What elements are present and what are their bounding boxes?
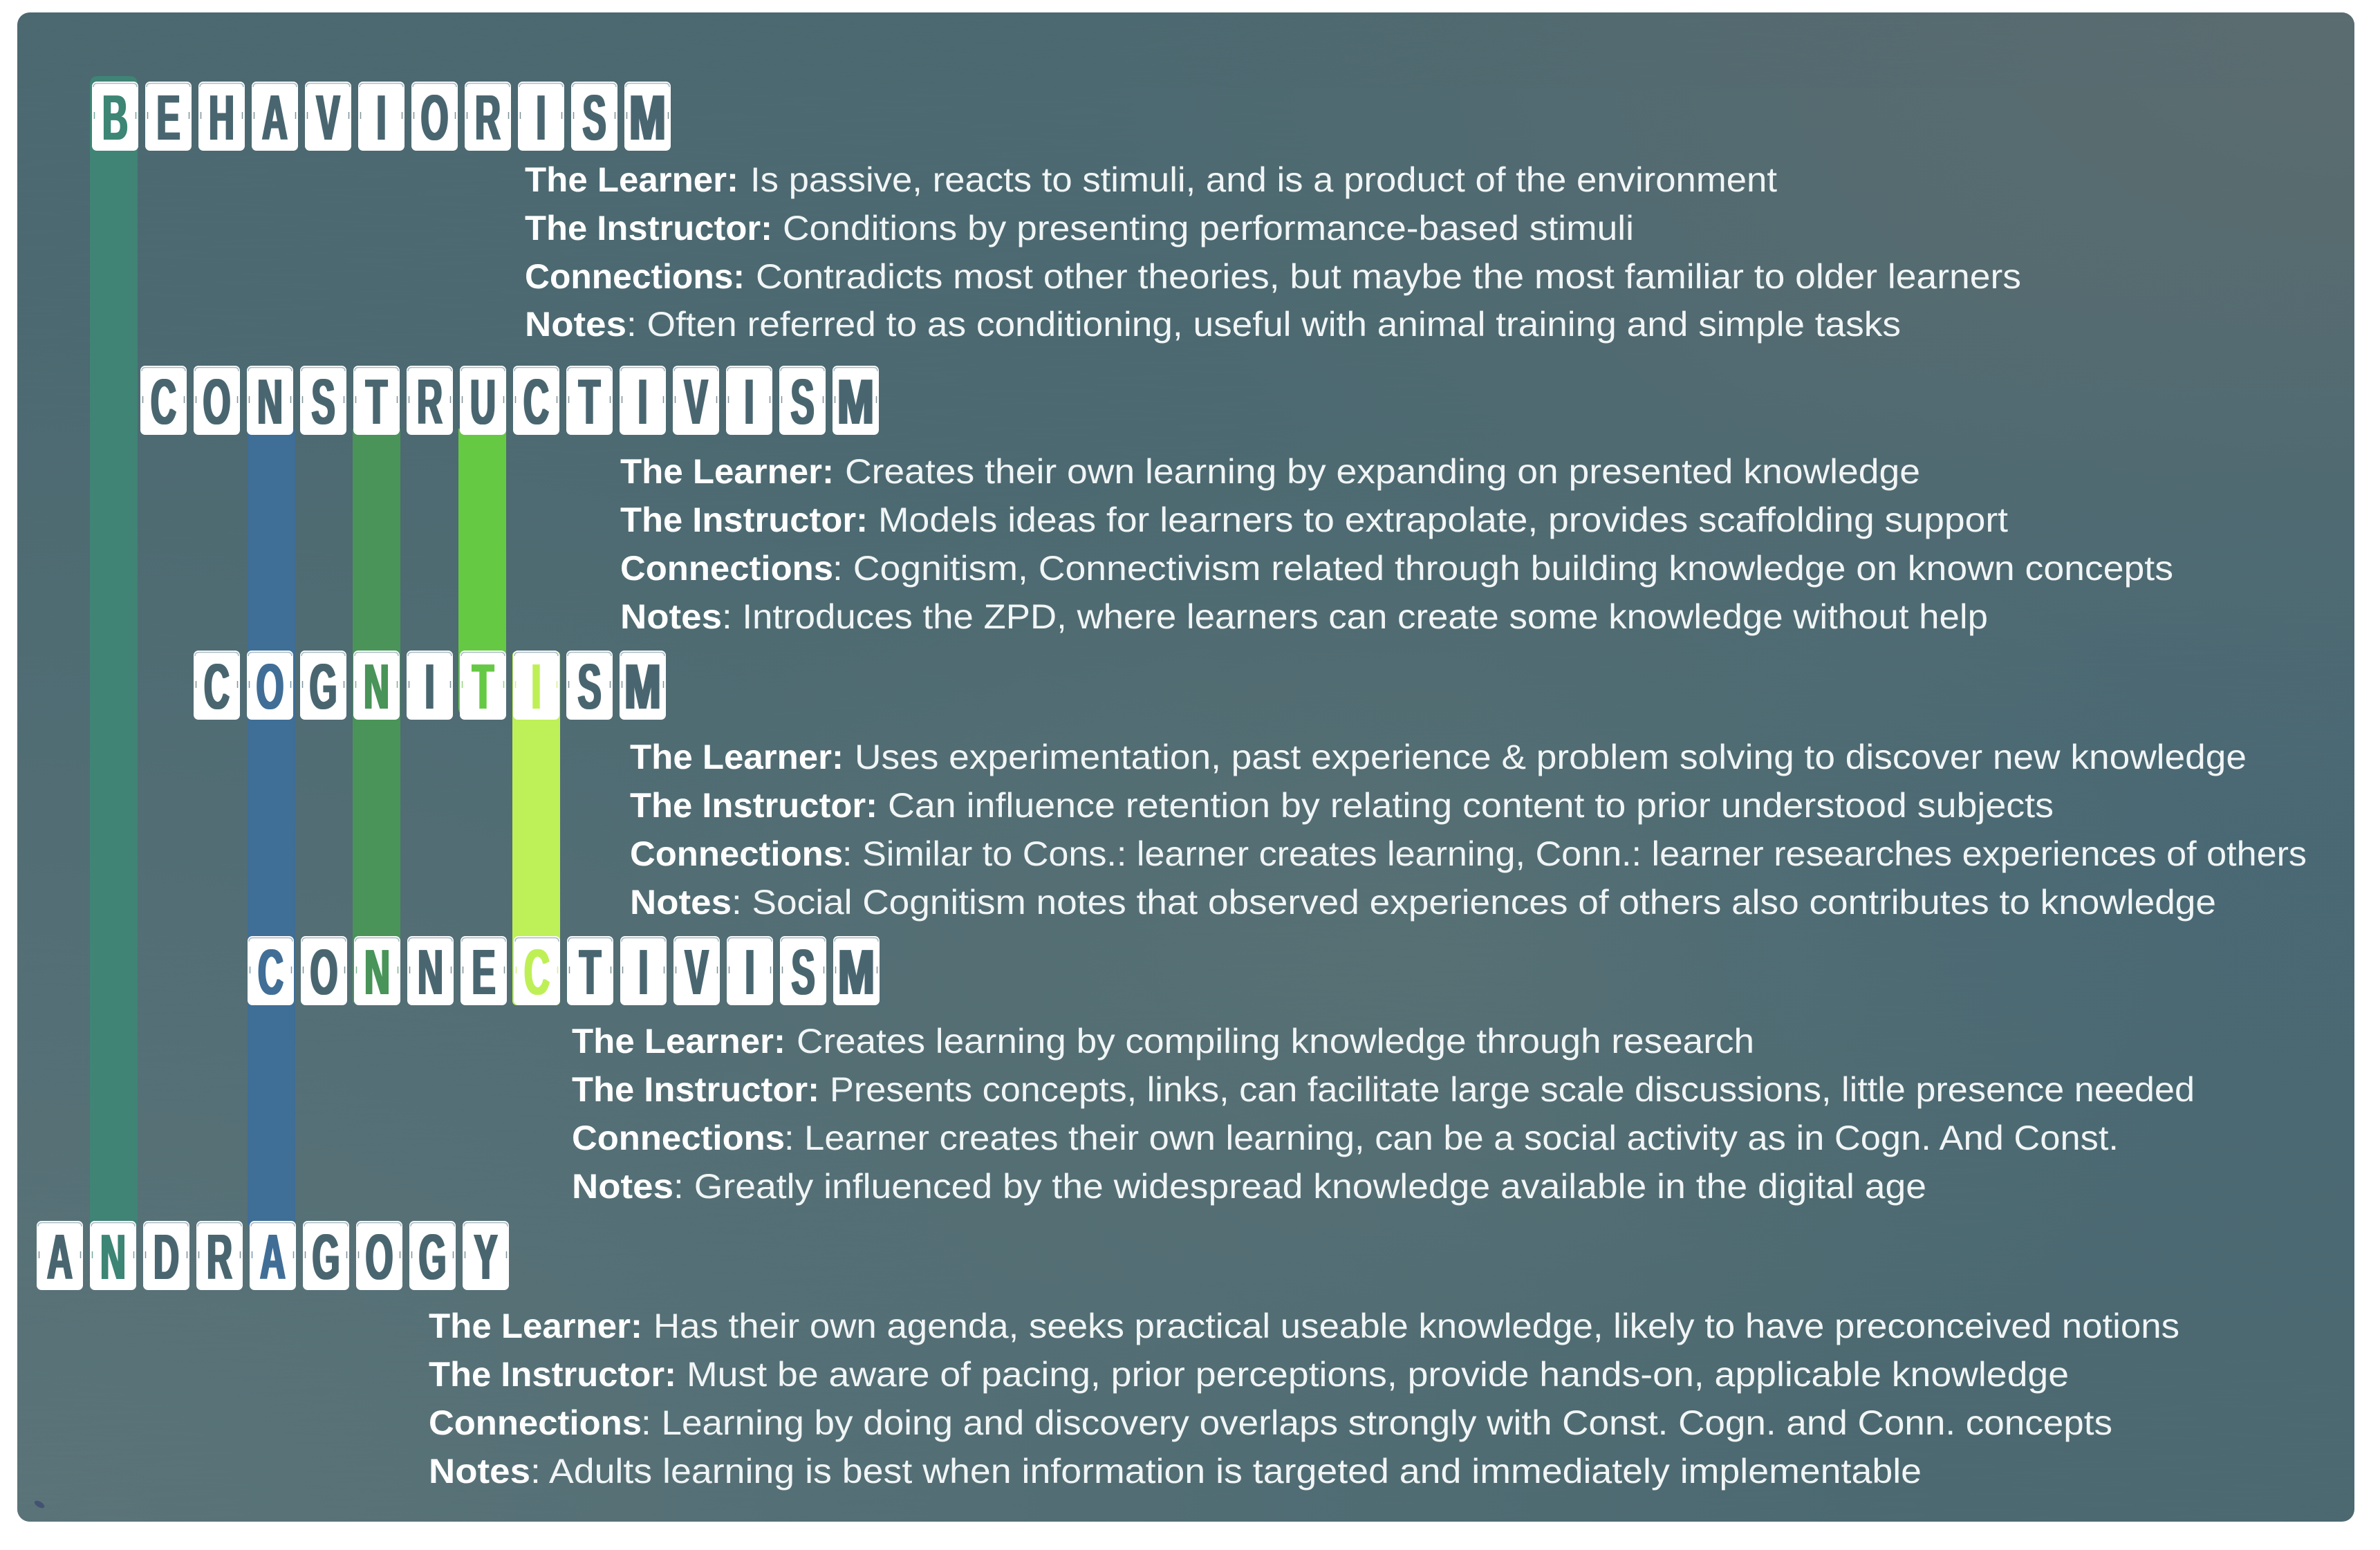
heading: CONSTRUCTIVISM: T bbox=[366, 366, 387, 438]
line: Connections: Connections bbox=[572, 1119, 785, 1157]
heading: COGNITISM: S bbox=[577, 651, 602, 722]
heading: COGNITISM: N bbox=[364, 651, 389, 722]
heading: CONSTRUCTIVISM: O bbox=[203, 366, 230, 438]
line: Notes: : Social Cognitism notes that observed experiences of others also contributes to knowledge bbox=[732, 883, 2216, 922]
heading: CONNECTIVISM: S bbox=[791, 936, 815, 1008]
line: Notes: : Adults learning is best when information is targeted and immediately implementable bbox=[530, 1452, 1922, 1491]
heading: BEHAVIORISM: S bbox=[582, 82, 606, 153]
heading: CONSTRUCTIVISM: M bbox=[837, 366, 874, 438]
bar: Behaviorism to Andragogy bbox=[90, 76, 138, 1225]
line: The Learner: The Learner: bbox=[620, 452, 834, 491]
heading: ANDRAGOGY: A bbox=[260, 1221, 286, 1293]
line: The Instructor: The Instructor: bbox=[620, 501, 868, 539]
line: Connections: : Learning by doing and discovery overlaps strongly with Const. Cogn. and Conn. concepts bbox=[641, 1403, 2112, 1442]
heading: CONNECTIVISM: V bbox=[685, 936, 709, 1008]
heading: COGNITISM bbox=[194, 651, 666, 722]
line: The Learner: The Learner: bbox=[525, 160, 738, 199]
heading: ANDRAGOGY: Y bbox=[474, 1221, 498, 1293]
heading: CONNECTIVISM: I bbox=[745, 936, 755, 1008]
heading: ANDRAGOGY: D bbox=[154, 1221, 179, 1293]
heading: CONSTRUCTIVISM bbox=[140, 366, 879, 438]
text block: Connectivism details bbox=[572, 1022, 2195, 1206]
line: Connections: : Cognitism, Connectivism related through building knowledge on known concepts bbox=[833, 549, 2173, 588]
line: The Instructor: Presents concepts, links, can facilitate large scale discussions, little presence needed bbox=[830, 1070, 2195, 1109]
heading: ANDRAGOGY: G bbox=[419, 1221, 446, 1293]
heading: COGNITISM: C bbox=[204, 651, 230, 722]
heading: ANDRAGOGY bbox=[37, 1221, 509, 1293]
line: Notes: : Introduces the ZPD, where learners can create some knowledge without help bbox=[722, 597, 1988, 636]
line: Notes: Notes bbox=[429, 1452, 530, 1491]
line: The Learner: Creates their own learning by expanding on presented knowledge bbox=[845, 452, 1920, 491]
heading: CONNECTIVISM: C bbox=[524, 936, 550, 1008]
line: Notes: Notes bbox=[525, 305, 626, 344]
heading: CONSTRUCTIVISM: T bbox=[579, 366, 600, 438]
heading: CONNECTIVISM: C bbox=[258, 936, 283, 1008]
heading: CONSTRUCTIVISM: C bbox=[151, 366, 176, 438]
heading: CONSTRUCTIVISM: I bbox=[638, 366, 648, 438]
heading: BEHAVIORISM: V bbox=[316, 82, 340, 153]
heading: CONSTRUCTIVISM: S bbox=[790, 366, 815, 438]
heading: COGNITISM: I bbox=[425, 651, 435, 722]
heading: CONSTRUCTIVISM: I bbox=[744, 366, 754, 438]
heading: BEHAVIORISM: R bbox=[475, 82, 501, 153]
heading: CONSTRUCTIVISM: S bbox=[311, 366, 335, 438]
line: The Instructor: Must be aware of pacing, prior perceptions, provide hands-on, applicable knowledge bbox=[687, 1355, 2069, 1394]
heading: CONNECTIVISM: N bbox=[364, 936, 390, 1008]
heading: CONNECTIVISM: I bbox=[638, 936, 649, 1008]
line: The Learner: The Learner: bbox=[630, 738, 844, 776]
line: Notes: : Greatly influenced by the widespread knowledge available in the digital age bbox=[673, 1167, 1926, 1206]
line: Connections: : Similar to Cons.: learner creates learning, Conn.: learner researches experiences of others bbox=[842, 834, 2307, 873]
heading: CONNECTIVISM: M bbox=[838, 936, 875, 1008]
line: The Learner: Uses experimentation, past experience & problem solving to discover new knowledge bbox=[855, 738, 2247, 776]
heading: BEHAVIORISM: M bbox=[629, 82, 666, 153]
heading: BEHAVIORISM: O bbox=[421, 82, 448, 153]
bar: Cognitism to Connectivism bbox=[512, 651, 560, 1005]
heading: COGNITISM: M bbox=[624, 651, 661, 722]
line: Notes: Notes bbox=[572, 1167, 673, 1206]
line: The Learner: Is passive, reacts to stimuli, and is a product of the environment bbox=[750, 160, 1777, 199]
heading: ANDRAGOGY: O bbox=[366, 1221, 393, 1293]
heading: BEHAVIORISM: I bbox=[536, 82, 546, 153]
line: Connections: Connections bbox=[630, 834, 843, 873]
line: The Learner: The Learner: bbox=[429, 1307, 642, 1345]
line: The Instructor: The Instructor: bbox=[572, 1070, 819, 1109]
heading: CONSTRUCTIVISM: U bbox=[470, 366, 496, 438]
bar: Constructivism to Andragogy bbox=[248, 429, 295, 1225]
heading: COGNITISM: G bbox=[310, 651, 337, 722]
heading: CONSTRUCTIVISM: R bbox=[417, 366, 443, 438]
heading: COGNITISM: I bbox=[531, 651, 541, 722]
line: The Learner: The Learner: bbox=[572, 1022, 785, 1061]
line: The Instructor: Models ideas for learners to extrapolate, provides scaffolding support bbox=[878, 501, 2008, 539]
heading: BEHAVIORISM bbox=[92, 82, 671, 153]
heading: BEHAVIORISM: I bbox=[376, 82, 387, 153]
heading: CONSTRUCTIVISM: C bbox=[523, 366, 549, 438]
line: Connections: Connections: bbox=[525, 257, 745, 296]
heading: COGNITISM: O bbox=[257, 651, 283, 722]
line: Notes: Notes bbox=[620, 597, 722, 636]
line: The Learner: Has their own agenda, seeks practical useable knowledge, likely to have preconceived notions bbox=[653, 1307, 2179, 1345]
heading: ANDRAGOGY: R bbox=[207, 1221, 232, 1293]
bar: Constructivism to Connectivism bbox=[353, 429, 400, 1002]
text block: Andragogy details bbox=[429, 1307, 2179, 1491]
line: The Instructor: The Instructor: bbox=[429, 1355, 676, 1394]
text block: Constructivism details bbox=[620, 452, 2173, 636]
line: The Instructor: Conditions by presenting performance-based stimuli bbox=[783, 209, 1634, 248]
heading: ANDRAGOGY: G bbox=[313, 1221, 340, 1293]
heading: BEHAVIORISM: B bbox=[102, 82, 128, 153]
line: The Instructor: Can influence retention by relating content to prior understood subjects bbox=[888, 786, 2054, 825]
text block: Cognitism details bbox=[630, 738, 2307, 922]
heading: CONNECTIVISM: N bbox=[418, 936, 443, 1008]
line: The Learner: Creates learning by compiling knowledge through research bbox=[797, 1022, 1754, 1061]
heading: CONNECTIVISM: O bbox=[310, 936, 337, 1008]
heading: BEHAVIORISM: E bbox=[156, 82, 180, 153]
line: Connections: Contradicts most other theories, but maybe the most familiar to older learners bbox=[756, 257, 2021, 296]
heading: CONSTRUCTIVISM: V bbox=[684, 366, 708, 438]
heading: COGNITISM: T bbox=[472, 651, 494, 722]
line: Connections: Connections bbox=[620, 549, 833, 588]
bar: Constructivism to Cognitism bbox=[458, 429, 506, 716]
line: The Instructor: The Instructor: bbox=[525, 209, 772, 248]
heading: CONNECTIVISM: E bbox=[472, 936, 496, 1008]
line: Notes: : Often referred to as conditioning, useful with animal training and simple tasks bbox=[626, 305, 1901, 344]
heading: ANDRAGOGY: A bbox=[47, 1221, 73, 1293]
heading: CONNECTIVISM bbox=[248, 936, 880, 1008]
heading: ANDRAGOGY: N bbox=[100, 1221, 126, 1293]
heading: CONNECTIVISM: T bbox=[579, 936, 601, 1008]
line: The Instructor: The Instructor: bbox=[630, 786, 877, 825]
heading: BEHAVIORISM: H bbox=[209, 82, 234, 153]
heading: BEHAVIORISM: A bbox=[262, 82, 288, 153]
line: Connections: Connections bbox=[429, 1403, 642, 1442]
line: Notes: Notes bbox=[630, 883, 732, 922]
text block: Behaviorism details bbox=[525, 160, 2021, 344]
heading: CONSTRUCTIVISM: N bbox=[257, 366, 283, 438]
line: Connections: : Learner creates their own learning, can be a social activity as in Cogn. And Const. bbox=[784, 1119, 2119, 1157]
